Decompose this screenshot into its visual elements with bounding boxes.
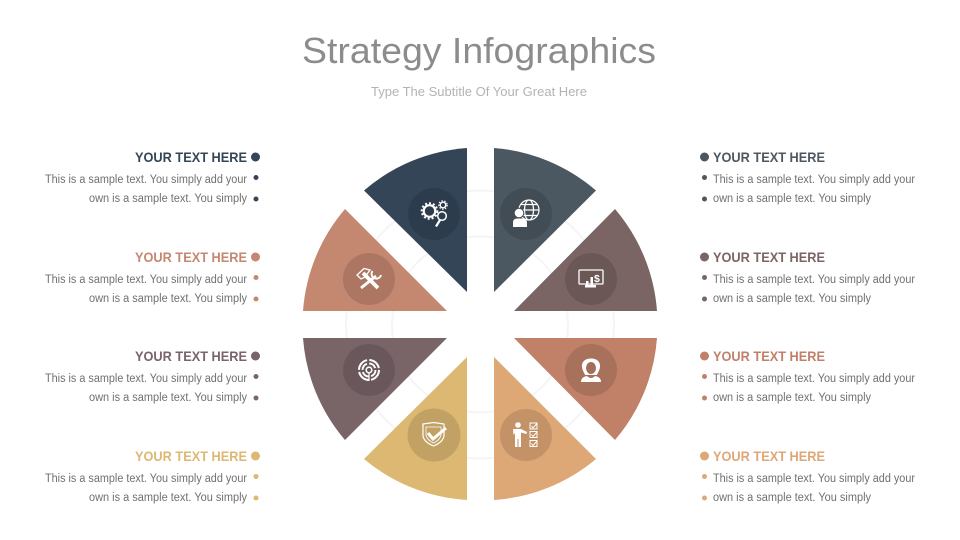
text block: left 3: This is a sample text. You simply add your xyxy=(45,373,247,385)
wedge: navy top left xyxy=(364,148,467,292)
text block: right 3: YOUR TEXT HERE xyxy=(713,348,825,364)
text block: left 4: YOUR TEXT HERE xyxy=(135,448,247,464)
text block: right 2: This is a sample text. You simply add your xyxy=(713,274,915,286)
text block: left 4 xyxy=(45,448,260,504)
text block: left 3 xyxy=(45,348,260,404)
text block: right 2: YOUR TEXT HERE xyxy=(713,249,825,265)
text block: left 2: This is a sample text. You simply add your xyxy=(45,274,247,286)
text block: right 1: own is a sample text. You simply xyxy=(713,193,871,205)
text block: right 1: This is a sample text. You simply add your xyxy=(713,174,915,186)
text block: left 1: YOUR TEXT HERE xyxy=(135,149,247,165)
wedge: terracotta lower right xyxy=(514,338,657,440)
text block: right 3 xyxy=(700,348,915,404)
text block: left 1: own is a sample text. You simply xyxy=(89,193,247,205)
wedge: mauve lower left xyxy=(303,338,447,440)
text block: left 2: YOUR TEXT HERE xyxy=(135,249,247,265)
text block: left 4: This is a sample text. You simply add your xyxy=(45,473,247,485)
text block: right 4: own is a sample text. You simply xyxy=(713,492,871,504)
wheel chart xyxy=(303,148,657,500)
text block: left 2: own is a sample text. You simply xyxy=(89,293,247,305)
text block: right 1 xyxy=(700,149,915,205)
icon: person with globe xyxy=(513,200,539,227)
wedge: slate top right xyxy=(494,148,596,292)
icon: hammer and wrench xyxy=(357,268,381,288)
icon: shield with check xyxy=(423,422,446,446)
text block: left 3: YOUR TEXT HERE xyxy=(135,348,247,364)
subtitle: Type The Subtitle Of Your Great Here xyxy=(371,84,587,99)
wedge: gold bottom left xyxy=(364,357,467,500)
title: Strategy Infographics xyxy=(302,30,656,71)
text block: left 3: own is a sample text. You simply xyxy=(89,392,247,404)
text block: right 4: YOUR TEXT HERE xyxy=(713,448,825,464)
text block: left 4: own is a sample text. You simply xyxy=(89,492,247,504)
text block: right 1: YOUR TEXT HERE xyxy=(713,149,825,165)
text block: right 4: This is a sample text. You simply add your xyxy=(713,473,915,485)
icon: woman portrait xyxy=(581,358,601,382)
icon: target xyxy=(359,360,379,381)
text block: left 1: This is a sample text. You simply add your xyxy=(45,174,247,186)
text block: right 2 xyxy=(700,249,915,305)
icon: presenter with checklist xyxy=(513,422,537,447)
text block: left 1 xyxy=(45,149,260,205)
wedge: terracotta upper left xyxy=(303,209,447,311)
text block: right 3: This is a sample text. You simply add your xyxy=(713,373,915,385)
wedge: peach bottom right xyxy=(494,357,596,500)
icon: monitor with dollar chart xyxy=(579,270,603,288)
text block: right 2: own is a sample text. You simply xyxy=(713,293,871,305)
icon: monitor with dollar chart: $ xyxy=(594,273,600,285)
text block: right 4 xyxy=(700,448,915,504)
text block: left 2 xyxy=(45,249,260,305)
text block: right 3: own is a sample text. You simply xyxy=(713,392,871,404)
wedge: mauve upper right xyxy=(514,209,657,311)
icon: gears and magnifier xyxy=(422,201,447,226)
